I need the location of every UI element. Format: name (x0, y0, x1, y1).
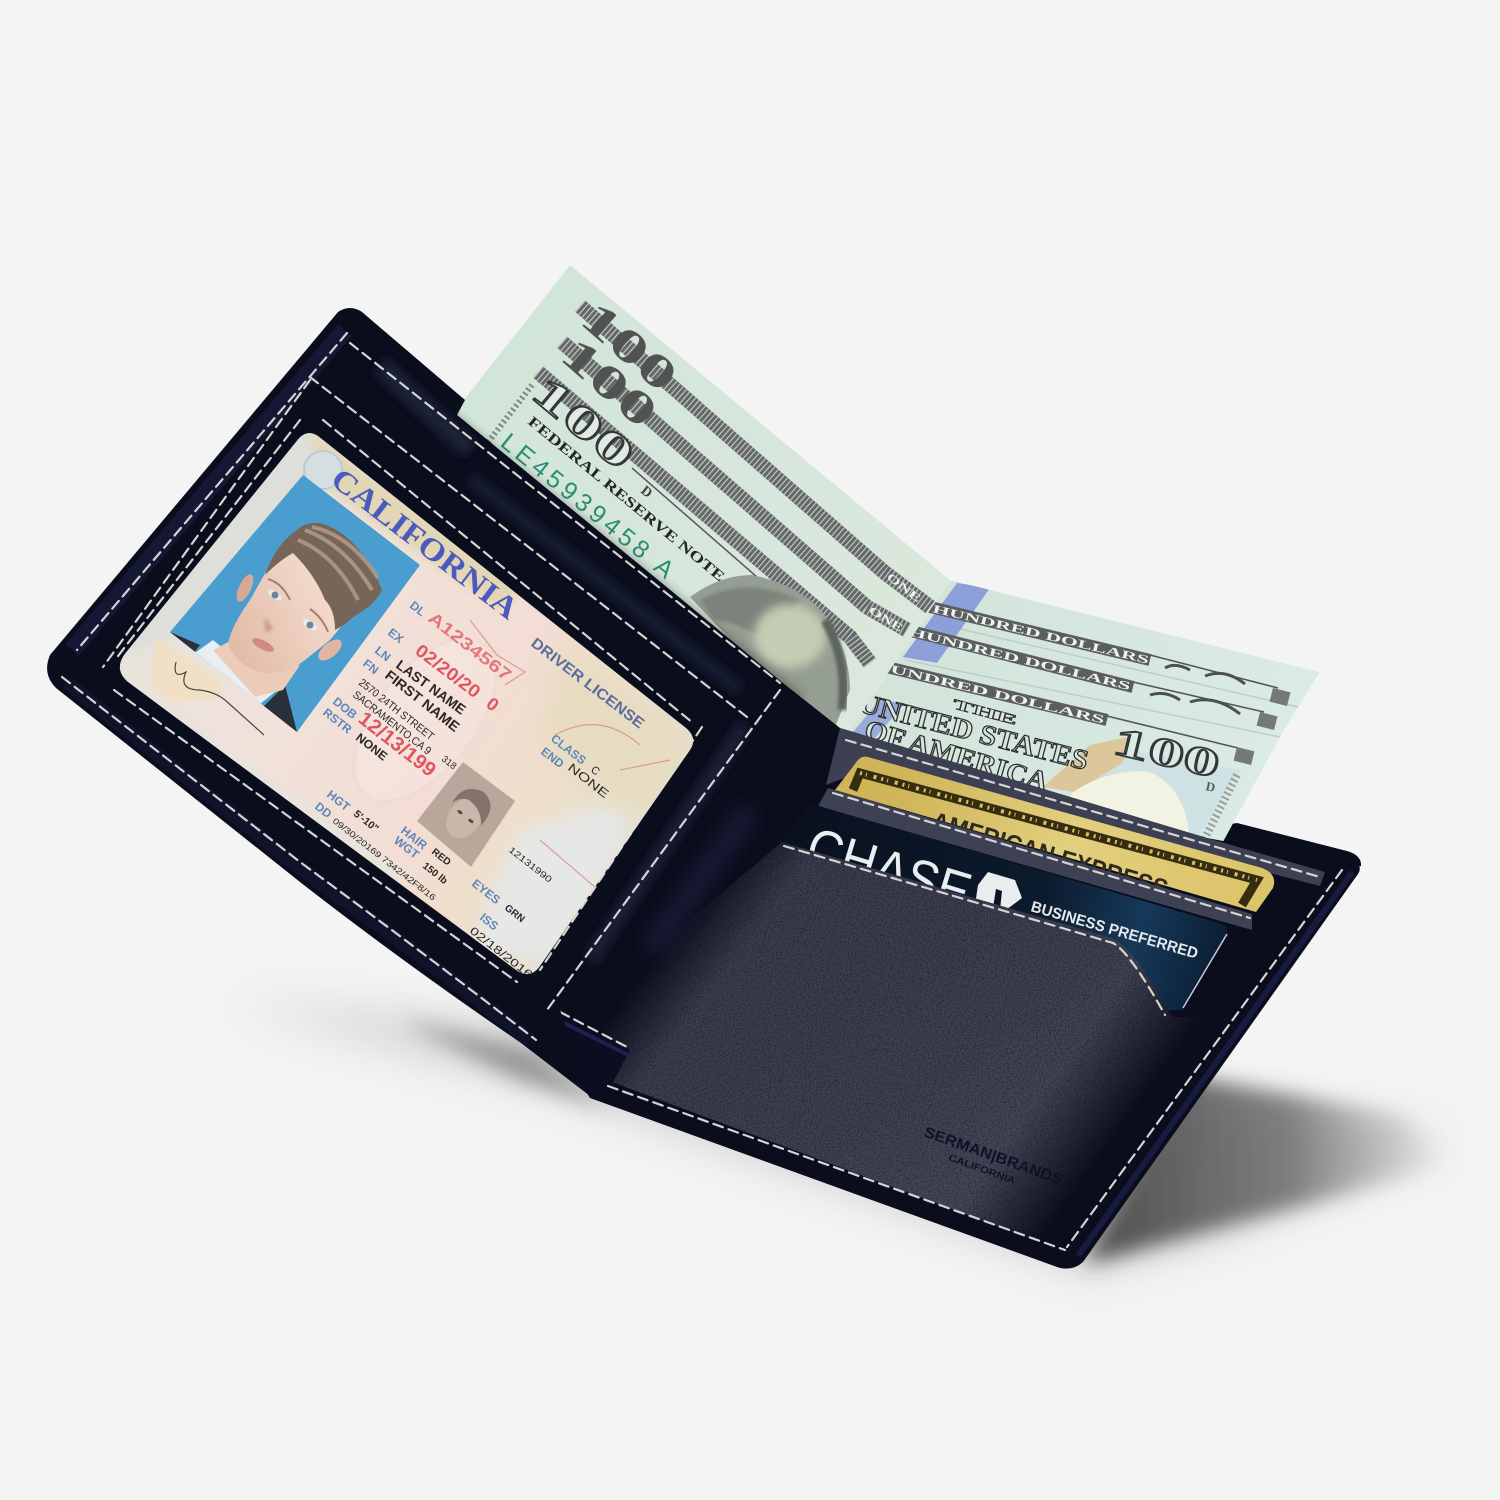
word ONE on each bill at the fold: ONE (866, 604, 905, 635)
ears (236, 574, 254, 602)
wallet edge shadow on bills (450, 418, 800, 700)
word ONE on each bill at the fold: ONE (884, 571, 923, 605)
license fields: SACRAMENTO,CA 9 (350, 689, 433, 757)
license fields: WGT (391, 833, 422, 862)
bills: right half (840, 572, 1320, 850)
license fields: 150 lb (420, 861, 449, 887)
license fields: 12131990 (507, 845, 554, 885)
license fields: EYES (469, 876, 503, 907)
facial features (250, 579, 328, 655)
card: American Express gold: AMERICAN EXPRESS (928, 807, 1171, 903)
numeral 100 on front bill: 100 (523, 366, 644, 480)
hair (265, 523, 382, 630)
card: Chase: CHASE (799, 815, 978, 924)
license fields (312, 598, 612, 981)
engraved band: rear bill: 100 (571, 291, 688, 402)
right panel stitching (608, 870, 1352, 1256)
license fields: EX (385, 625, 406, 646)
second pocket band (818, 788, 1252, 930)
pocket stitching (784, 846, 1165, 1015)
license fields: 5'-10" (351, 808, 381, 835)
license fields: NONE (353, 730, 390, 764)
serrated bill edge (1205, 775, 1237, 838)
brand stamp: CALIFORNIA (947, 1152, 1017, 1187)
currency text rows: THE (951, 697, 1019, 729)
license fields: GRN (502, 903, 526, 925)
card: American Express gold (835, 757, 1274, 912)
license fields: 09/30/20169 7342/42F8/16 (331, 816, 438, 903)
district letter: D (637, 483, 655, 501)
serial number: LE45939458 A (495, 428, 679, 585)
banknotes (440, 265, 1320, 850)
license fields: RED (429, 847, 453, 868)
state heading: CALIFORNIA (325, 461, 526, 627)
license fields: 2570 24TH STREET (356, 677, 436, 743)
license fields: END (538, 744, 567, 771)
neck and shirt (196, 640, 276, 704)
card tone patches (100, 420, 700, 960)
currency text rows: UNITED STATES (855, 688, 1091, 777)
seal (304, 451, 342, 489)
currency text rows: HUNDRED DOLLARS (931, 603, 1150, 667)
numeral 100 (front bill, right): 100 (1109, 718, 1224, 787)
head (228, 545, 345, 673)
rear wallet strip behind bills (1205, 823, 1361, 890)
panel: right back (560, 683, 1360, 1269)
word ONE on each bill at the fold (866, 571, 923, 635)
district letter right: D (1204, 778, 1217, 795)
license fields: 02/20/20 (412, 640, 484, 702)
license fields: 0 (483, 693, 503, 715)
license fields: LAST NAME (393, 656, 469, 718)
card: Chase: BUSINESS PREFERRED (1029, 899, 1200, 963)
license caption: DRIVER LICENSE (528, 635, 647, 732)
bills: left half (440, 265, 950, 745)
fold shine (650, 810, 750, 950)
license fields: CLASS (548, 731, 589, 767)
panel: left with ID window (47, 308, 790, 1096)
license fields: A1234567 (425, 608, 515, 685)
pale oval (1070, 771, 1189, 832)
license fields: ISS (477, 910, 501, 933)
currency text rows (855, 603, 1150, 797)
license fields: 318 (439, 754, 458, 772)
license fields: DD (312, 799, 335, 821)
panel: front pocket (560, 842, 1240, 1252)
brand stamp: SERMAN|BRANDS (922, 1124, 1065, 1189)
pale blue seal field (1065, 752, 1240, 836)
suit (170, 632, 200, 652)
stitching rows (62, 333, 780, 1040)
license fields: HAIR (398, 823, 430, 853)
license fields: FIRST NAME (382, 667, 463, 735)
ornate border (853, 773, 1257, 905)
license fields: 12/13/199 (354, 708, 440, 782)
leather gloss (380, 365, 745, 960)
wallet cast shadow (225, 1002, 1450, 1272)
engraved band: middle bill (538, 327, 907, 630)
engraved band: rear bill (558, 291, 930, 607)
currency bands (888, 602, 1290, 765)
engraved band: front bill (538, 372, 870, 663)
numeral 100 (rear bills, right) (1150, 665, 1245, 714)
license fields: RSTR (320, 705, 355, 737)
blue rim (72, 330, 345, 650)
small fold pocket (548, 1010, 630, 1098)
currency text rows: HUNDRED DOLLARS (907, 626, 1131, 693)
license fields: HGT (324, 787, 353, 814)
federal reserve note caption: FEDERAL RESERVE NOTE (524, 414, 728, 585)
license fields: DL (407, 598, 428, 619)
rear pocket band (826, 728, 1325, 886)
map lines (470, 620, 670, 900)
cream swoosh (1044, 737, 1128, 792)
hologram oval (326, 614, 524, 826)
signature (175, 662, 264, 735)
signature panel (150, 637, 220, 703)
license fields: C (588, 764, 602, 778)
license fields: DOB (330, 694, 360, 722)
currency text rows: OF AMERICA (861, 714, 1053, 797)
Franklin portrait (690, 575, 850, 732)
wallet (47, 308, 1360, 1269)
license fields: FN (360, 656, 381, 677)
license fields: 02/18/2016 (467, 925, 534, 981)
portrait photo (170, 475, 420, 732)
blue security strip (852, 583, 990, 738)
serrated bill corner (486, 385, 532, 445)
license fields: LN (372, 643, 393, 664)
ghost portrait (417, 762, 515, 867)
license fields: NONE (565, 760, 612, 801)
engraved band: middle bill: 100 (551, 327, 668, 438)
currency text rows: HUNDRED DOLLARS (871, 659, 1106, 726)
card: Chase (770, 804, 1227, 1010)
ID window (120, 433, 694, 974)
